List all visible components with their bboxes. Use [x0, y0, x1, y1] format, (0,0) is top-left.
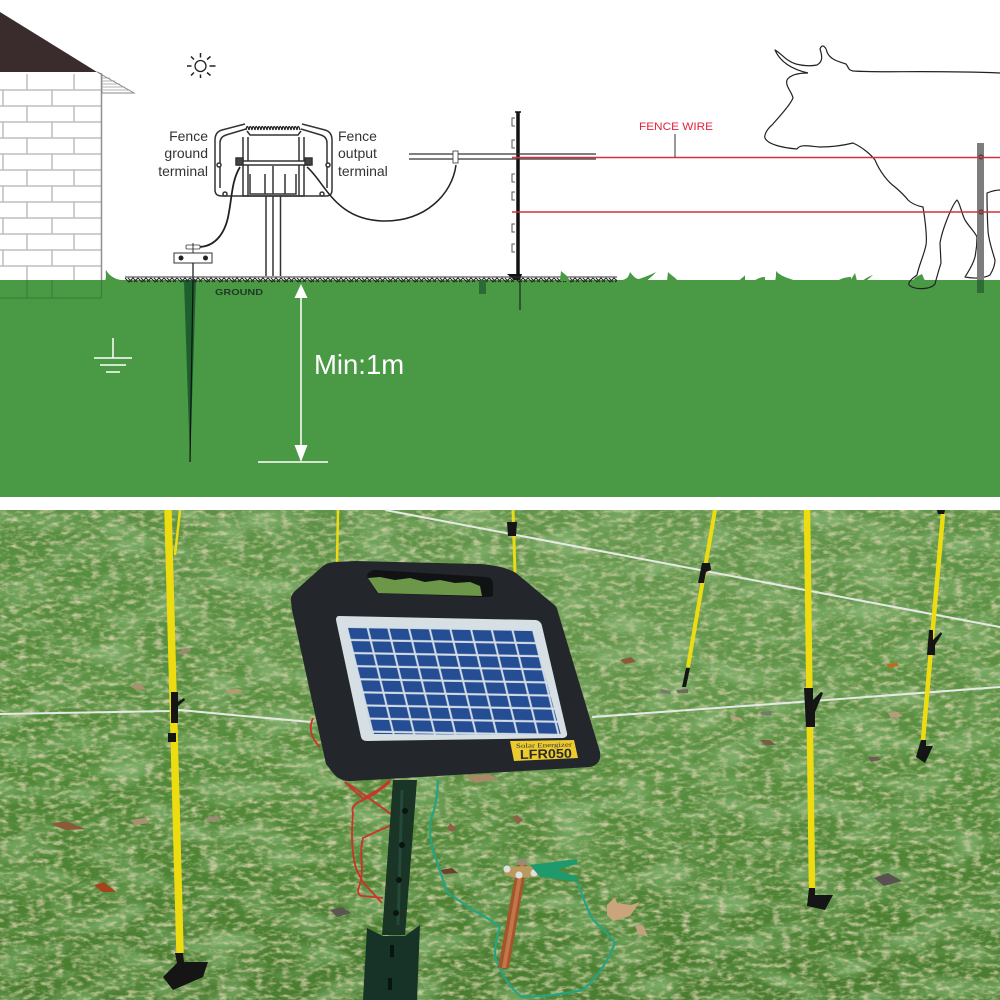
fence output cable and insulator	[409, 151, 596, 163]
solar energizer	[291, 561, 600, 781]
grey pasture post	[977, 143, 984, 293]
icon: ground rod in soil	[184, 263, 196, 462]
pole clips and feet	[163, 510, 945, 990]
green ground wire	[430, 780, 615, 997]
fallen leaves	[50, 648, 903, 937]
dark post stub	[479, 280, 486, 294]
housing	[291, 561, 600, 781]
cow outline	[765, 46, 1000, 289]
red wires	[311, 718, 392, 903]
fence lead wire	[307, 165, 456, 221]
ground lead wire	[198, 167, 240, 247]
handle grip hole	[367, 570, 493, 597]
panel: field photo	[0, 510, 1000, 1000]
grounding clamp	[503, 866, 538, 878]
soil surface line	[125, 277, 617, 283]
icon: ground rod clamp	[174, 243, 212, 263]
energizer stand	[266, 196, 280, 276]
copper ground rod	[498, 859, 528, 968]
label: ground: GROUND	[215, 287, 263, 297]
label: fence output terminal: terminal	[338, 163, 388, 179]
label: fence ground terminal: terminal	[158, 163, 208, 179]
model label: LFR050	[520, 746, 572, 762]
label: fence ground terminal: Fence	[169, 128, 208, 144]
icon: sun	[187, 53, 216, 78]
label: minimum depth: Min:1m	[314, 349, 404, 380]
model label	[510, 740, 578, 762]
label: fence wire: FENCE WIRE	[639, 121, 713, 133]
label: fence output terminal: output	[338, 145, 377, 161]
energizer line drawing	[215, 124, 332, 196]
depth arrow	[258, 284, 328, 462]
grass background	[0, 510, 1000, 1000]
solar cells	[347, 627, 561, 735]
icon: earth symbol	[94, 338, 132, 372]
ground band	[0, 280, 1000, 497]
panel: wiring diagram	[0, 12, 1000, 497]
background white fence wires	[0, 510, 1000, 722]
label: fence wire	[639, 121, 713, 157]
label: fence output terminal: Fence	[338, 128, 377, 144]
green crocodile clip	[530, 859, 578, 882]
grass tufts	[105, 270, 925, 281]
fence wires	[512, 158, 1000, 212]
yellow fence poles	[168, 510, 943, 953]
model label: Solar Energizer	[516, 742, 573, 750]
solar panel frame	[336, 616, 567, 741]
label: fence ground terminal: ground	[164, 145, 208, 161]
icon: house	[0, 12, 134, 298]
icon: fence post	[507, 112, 522, 310]
metal post	[363, 780, 420, 1000]
